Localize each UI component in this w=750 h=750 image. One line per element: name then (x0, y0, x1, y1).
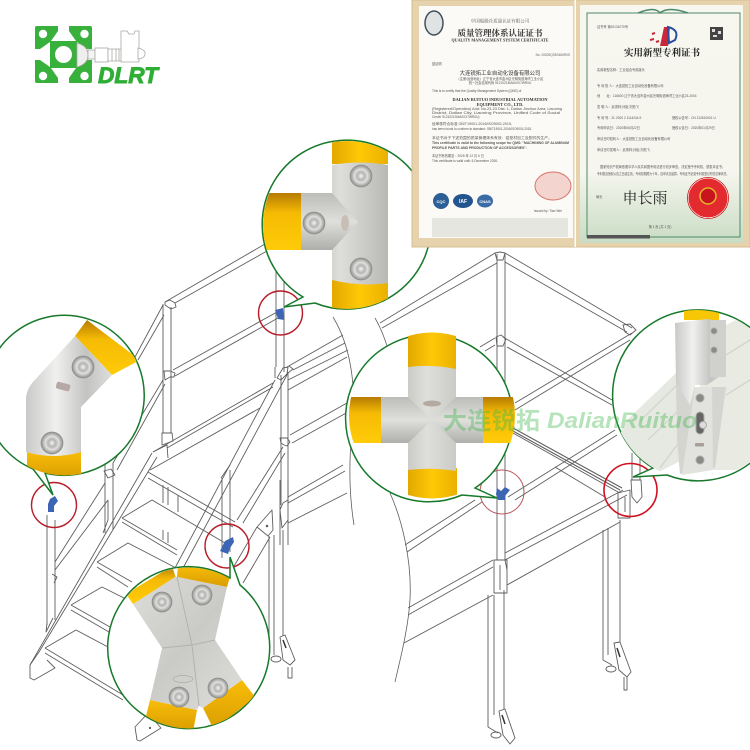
signer label: 局长 (596, 194, 603, 199)
certificate heading (452, 18, 549, 42)
stair diagonals (175, 373, 288, 583)
lower bracket (676, 382, 726, 474)
certificate body text: 兹证明 (432, 61, 442, 66)
marker: base bracket (604, 464, 657, 516)
screws (152, 585, 228, 707)
marker: T joint (258, 291, 302, 335)
patent body text: 授权公告号：CN 212610001 U (672, 115, 716, 120)
fitting creases (162, 577, 215, 706)
line drawing: stair platform (30, 244, 642, 744)
watermark: 大连锐拓 (443, 408, 540, 435)
date: 第 1 页 (共 1 页) (649, 224, 671, 229)
red marker circles and blue joints (32, 291, 657, 568)
logo: DLRT (35, 26, 160, 88)
patent body text: 授权公告日：2020年01月29日 (672, 125, 715, 130)
far legs and corner bracket (603, 453, 642, 690)
upper bracket (675, 319, 718, 404)
signature: 申长雨 (622, 190, 668, 207)
callout: X fitting (108, 557, 270, 732)
certificate heading: 质量管理体系认证证书 (458, 28, 543, 38)
stair-side post and foot (257, 480, 295, 678)
grey X body (133, 577, 242, 710)
certificate: utility model patent (580, 5, 743, 243)
certificate body text: This certificate is valid to the following scope for QMS: "MACHINING OF ALUMINUM (432, 141, 569, 145)
watermark: DalianRuituo (547, 408, 697, 433)
certificate body text: PROFILE PARTS AND PRODUCTION OF ACCESSORIES". (432, 146, 527, 150)
screws (41, 356, 94, 454)
patent body text: 国家知识产权局依照中华人民共和国专利法进行初步审查，决定授予专利权，颁发本证书。 (600, 164, 725, 169)
certificate body text: EQUIPMENT CO., LTD. (477, 102, 523, 107)
marker: X joint (205, 524, 249, 568)
grey elbow body (26, 336, 112, 456)
red seal (688, 178, 728, 218)
patent body text: 专 利 权 人：大连锐拓工业自动化设备有限公司 (597, 83, 663, 88)
grey cross body (408, 366, 456, 471)
upper deck rails (380, 253, 636, 500)
patent body text: 证书号 第20131070号 (597, 24, 628, 29)
outer stringer (30, 453, 161, 741)
certificate body text (432, 53, 570, 163)
yellow pipe ends (27, 320, 140, 478)
certificate body text: This is to certify that the Quality Management System (QMS) of (432, 89, 521, 93)
certificate body text: 统一社会信用代码 91210213MA0XX7WR0U (469, 80, 532, 85)
bracket fasteners (696, 328, 717, 464)
certificate heading: QUALITY MANAGEMENT SYSTEM CERTIFICATE (452, 38, 549, 42)
certificate body text: 经审核符合标准 GB/T19001-2016/ISO9001:2015, (432, 121, 512, 126)
patent heading: 实用新型专利证书 (624, 47, 700, 59)
logo icon: bolt and block (77, 31, 145, 67)
upper left handrail and post (113, 244, 278, 470)
patent emblem (650, 27, 676, 46)
patent body text (597, 24, 729, 176)
screws (303, 165, 372, 280)
maker mark (695, 443, 704, 446)
issuer emblem (425, 11, 443, 35)
callout: base bracket (613, 308, 750, 481)
certificate body text: DALIAN RUITUO INDUSTRIAL AUTOMATION (452, 97, 548, 102)
certificate body text: (Registered/Operation) Add: No.23-23 Dist. 1, Dalian Jinzhou Area, Liaoning (432, 107, 562, 111)
accreditation logos (433, 193, 493, 209)
callout: elbow fitting (0, 315, 144, 495)
fine print block (432, 218, 568, 237)
grey T body (332, 162, 388, 284)
patent body text: 专利权自授权公告之日起生效。专利权期限为十年，自申请日起算。专利证书记载专利权登记时的法律状况。 (597, 171, 729, 176)
certificate: quality management (419, 6, 573, 238)
aluminium extrusions (618, 312, 750, 475)
logo icon: aluminium profile (35, 26, 92, 83)
certificate body text: （注册/运营地址）辽宁省大连市金州区光明街道海湾工业小区 (457, 76, 544, 81)
patent body text: 申请日时发明人：武肃林;孙钜;刘拓飞 (597, 147, 651, 152)
patent body text: 申请日时权利人：大连锐拓工业自动化设备有限公司 (597, 136, 670, 141)
certificate body text: 本证书对于下述范围的质量管理体系有效：铝型材加工及配件的生产。 (432, 135, 552, 140)
maker mark (341, 215, 349, 231)
patent body text: 实用新型名称：工业铝合专用接头 (597, 67, 646, 72)
certificate heading: 中国船级社质量认证有限公司 (471, 18, 530, 24)
red stamp (535, 172, 571, 200)
callout: cross fitting (345, 332, 517, 502)
QR code (710, 27, 723, 40)
yellow tube (684, 310, 719, 320)
top ornament (638, 10, 688, 13)
accreditation logos: CNAS (479, 199, 491, 204)
certificate body text: District, Dalian City, Liaoning Province, Unified Code of Social (432, 111, 560, 115)
marker: cross joint (480, 470, 524, 514)
certificate body text: Credit: 91210213MA0XX7WR0U) (432, 115, 479, 119)
barcode strip (587, 235, 650, 238)
maker mark (173, 676, 193, 682)
left post and second rail (46, 460, 115, 632)
certificates frame (412, 0, 750, 247)
issued by: Issued by: Tian Wei (534, 209, 562, 213)
patent body text: 地 址：116600 辽宁省大连市金州区光明街道海湾工业小区23-2004 (597, 93, 697, 98)
lower deck beams (404, 490, 627, 643)
yellow pipe ends (126, 565, 255, 732)
logo wordmark: DLRT (98, 63, 160, 88)
centre post (275, 270, 293, 505)
watermark (443, 408, 697, 435)
maker mark (55, 381, 71, 392)
patent body text: 专 利 号：ZL 2020 2 1114244.9 (597, 115, 641, 120)
certificate body text: 本证书有效期至：2026 年 12 月 6 日 (432, 153, 484, 158)
stair top rails (150, 335, 348, 523)
yellow pipe ends (345, 332, 517, 500)
patent body text: 专利申请日：2020年06月22日 (597, 125, 640, 130)
break curves (333, 317, 410, 682)
marker: elbow joint (32, 482, 76, 528)
accreditation logos: CQC (437, 199, 446, 204)
right post (488, 252, 515, 744)
yellow pipe ends (262, 138, 388, 312)
maker mark (423, 400, 441, 406)
accreditation logos: IAF (459, 199, 467, 205)
callout: T fitting (262, 138, 431, 312)
patent body text: 发 明 人：武肃林;孙钜;刘拓飞 (597, 104, 640, 109)
certificate body text: has been found to conform to standard: GB/T19001-2016/ISO9001:2015. (432, 127, 532, 131)
certificate body text: This certificate is valid until: 6 December 2026. (432, 159, 498, 163)
certificate body text: No. 00525Q35S466R0S (536, 53, 570, 57)
T gusset (301, 193, 358, 250)
certificate body text: 大连锐拓工业自动化设备有限公司 (460, 69, 540, 77)
stair treads (45, 472, 235, 700)
